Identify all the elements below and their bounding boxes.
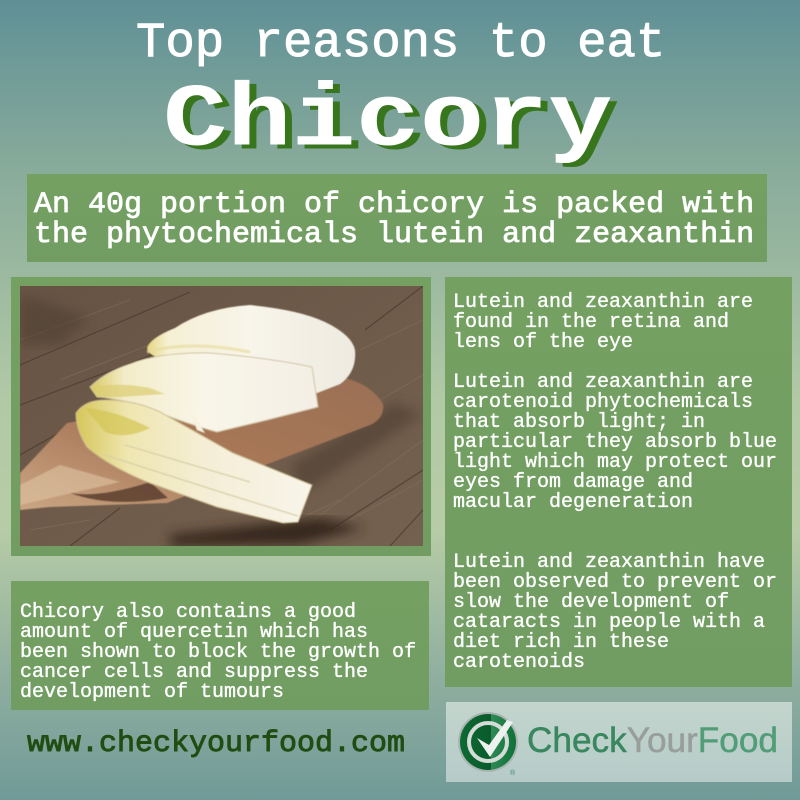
- panel: lutein text: [445, 277, 792, 687]
- logo: CheckYourFood: ®: [510, 769, 516, 777]
- panel: photo frame: [11, 277, 431, 556]
- photo: chicory heads on a wooden board: [20, 286, 423, 546]
- text: intro: An 40g portion of chicory is packed with the phytochemicals lutein and zeaxanthin: [34, 188, 754, 252]
- text: quercetin: Chicory also contains a good amount of quercetin which has been shown to block the growth of cancer cells and suppress the development of tumours: [20, 601, 416, 704]
- logo: CheckYourFood: [446, 702, 792, 782]
- shadows: [170, 518, 365, 546]
- panel: quercetin text: [11, 581, 429, 710]
- panel: intro banner: [27, 174, 767, 262]
- title: Chicory: Chicory: [163, 71, 612, 172]
- text: lutein facts: Lutein and zeaxanthin are found in the retina and lens of the eye Lutein and zeaxanthin are carotenoid phytochemicals that absorb light; in particular they absorb blue light which may protect our eyes from damage and macular degeneration Lutein and zeaxanthin have been observed to prevent or slow the development of cataracts in people with a diet rich in these carotenoids: [453, 291, 777, 674]
- title: top reasons to eat: Top reasons to eat: [136, 15, 665, 71]
- logo: CheckYourFood: CheckYourFood: [527, 721, 778, 760]
- website url: www.checkyourfood.com: [27, 727, 405, 761]
